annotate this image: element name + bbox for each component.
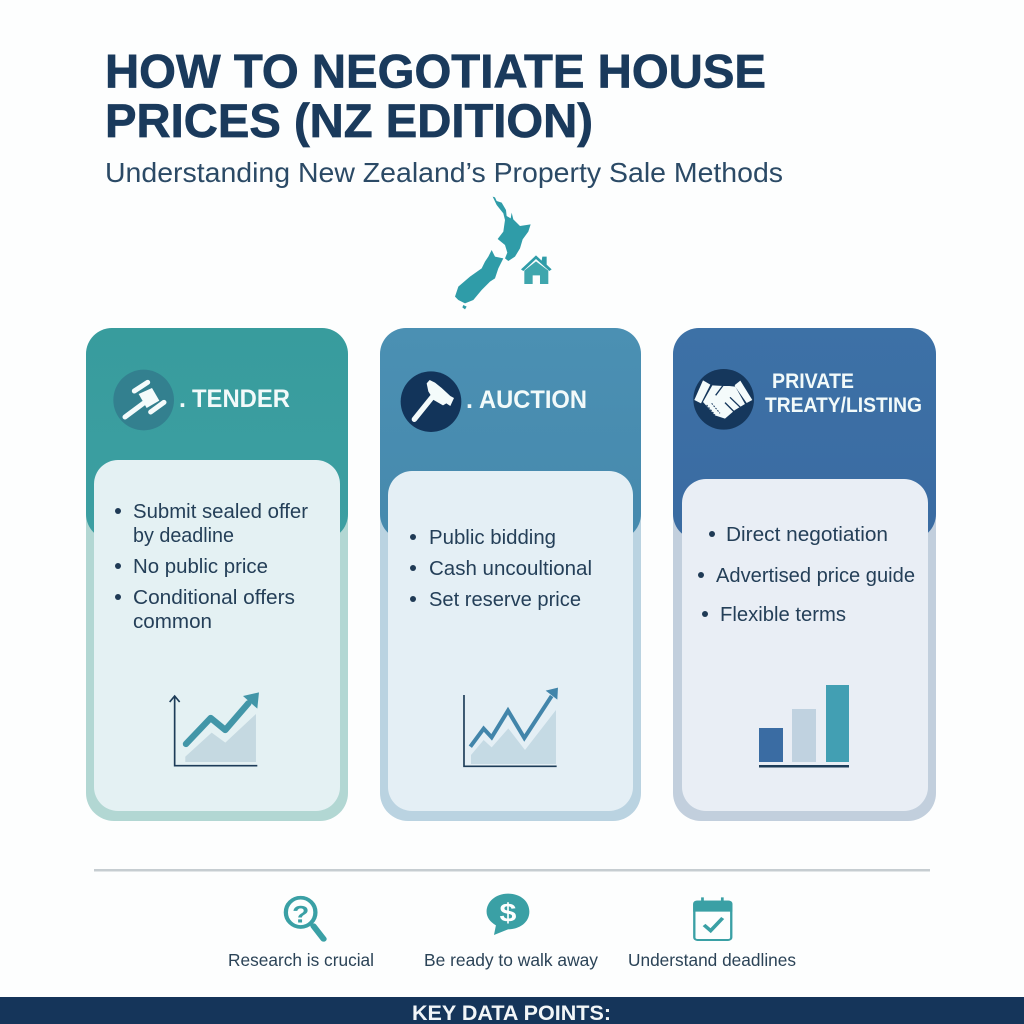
card body xyxy=(682,479,928,811)
icon: hammer xyxy=(401,371,461,432)
icon: speech bubble with dollar: $ xyxy=(500,897,517,927)
bullet list xyxy=(115,501,308,633)
bullet list xyxy=(698,524,915,626)
card frame xyxy=(380,328,641,821)
card header xyxy=(86,328,348,540)
icon: magnifier with question mark xyxy=(286,898,324,939)
panel: auction xyxy=(380,328,641,821)
icon: gavel xyxy=(113,370,174,430)
tip text: Understand deadlines xyxy=(628,950,796,970)
tip: research xyxy=(228,898,374,970)
heading: private treaty/listing xyxy=(765,370,922,417)
card frame xyxy=(673,328,936,821)
heading: tender: . xyxy=(179,385,186,413)
title: PRICES (NZ EDITION) xyxy=(105,94,593,147)
bullet list: Flexible terms xyxy=(720,604,846,626)
chart: volatile area line xyxy=(464,688,558,766)
bullet list: Advertised price guide xyxy=(716,565,915,587)
tip text: Research is crucial xyxy=(228,950,374,970)
icon: speech bubble with dollar xyxy=(487,894,529,935)
card frame xyxy=(86,328,348,821)
heading word: TENDER xyxy=(192,385,290,413)
tip text: Be ready to walk away xyxy=(424,950,598,970)
bullet list: Public bidding xyxy=(429,527,556,549)
chart: bar chart xyxy=(759,685,849,768)
card body xyxy=(94,460,340,811)
bullet list: common xyxy=(133,611,212,633)
icon: New Zealand map with house xyxy=(455,197,552,309)
bullet list: by deadline xyxy=(133,525,234,547)
heading: private treaty/listing: TREATY/LISTING xyxy=(765,394,922,417)
chart: rising area line xyxy=(170,692,259,766)
icon: magnifier with question mark: ? xyxy=(292,901,309,928)
bullet list: Cash uncoultional xyxy=(429,558,592,580)
tip: walk away xyxy=(424,894,598,970)
footer bar xyxy=(0,997,1024,1024)
icon: handshake xyxy=(693,369,754,430)
heading: private treaty/listing: PRIVATE xyxy=(772,370,854,393)
tip: deadlines xyxy=(628,897,796,970)
card header xyxy=(673,328,936,540)
panel: private treaty xyxy=(673,328,936,821)
bullet list: Submit sealed offer xyxy=(133,501,308,523)
icon: calendar with check xyxy=(693,897,732,940)
bullet list: Set reserve price xyxy=(429,589,581,611)
bullet list: No public price xyxy=(133,556,268,578)
bullet list: Direct negotiation xyxy=(726,524,888,546)
panel: tender xyxy=(86,328,348,821)
card body xyxy=(388,471,633,811)
bullet list: Conditional offers xyxy=(133,587,295,609)
heading word: AUCTION xyxy=(479,386,587,414)
title xyxy=(105,44,766,147)
title: HOW TO NEGOTIATE HOUSE xyxy=(105,44,766,98)
divider xyxy=(94,869,930,872)
card header xyxy=(380,328,641,540)
subtitle: Understanding New Zealand’s Property Sale Methods xyxy=(105,157,783,188)
bullet list xyxy=(410,527,592,611)
heading: auction: . xyxy=(466,386,473,414)
